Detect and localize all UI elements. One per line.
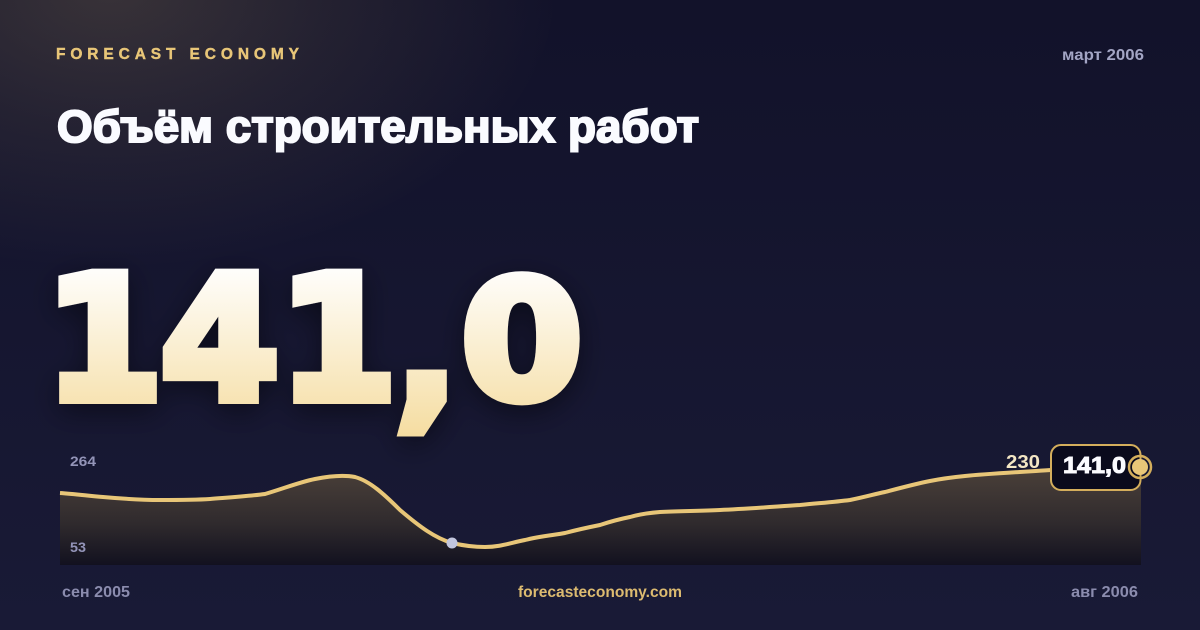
date label: март 2006 bbox=[1062, 47, 1144, 64]
area chart bbox=[60, 467, 1141, 565]
big value: 0 bbox=[461, 246, 583, 437]
start date label: сен 2005 bbox=[62, 584, 130, 601]
axis max label: 264 bbox=[70, 453, 96, 469]
axis min label: 53 bbox=[70, 539, 86, 555]
brand label: FORECAST ECONOMY bbox=[56, 46, 300, 63]
current value callout bbox=[1051, 445, 1151, 490]
callout box bbox=[1051, 445, 1140, 490]
end date label: авг 2006 bbox=[1071, 584, 1138, 601]
big value: , bbox=[394, 247, 459, 448]
big value: 1 bbox=[278, 239, 398, 440]
title: Объём строительных работ bbox=[57, 101, 699, 152]
big value: 4 bbox=[160, 239, 280, 440]
big value bbox=[44, 239, 583, 448]
chart area fill bbox=[60, 467, 1141, 565]
peak value label: 230 bbox=[1006, 451, 1040, 472]
source link: forecasteconomy.com bbox=[518, 584, 682, 601]
chart line bbox=[60, 470, 1052, 547]
min point marker bbox=[446, 538, 458, 548]
callout value: 141,0 bbox=[1063, 452, 1126, 478]
end point marker bbox=[1129, 456, 1151, 478]
big value: 1 bbox=[44, 239, 164, 440]
